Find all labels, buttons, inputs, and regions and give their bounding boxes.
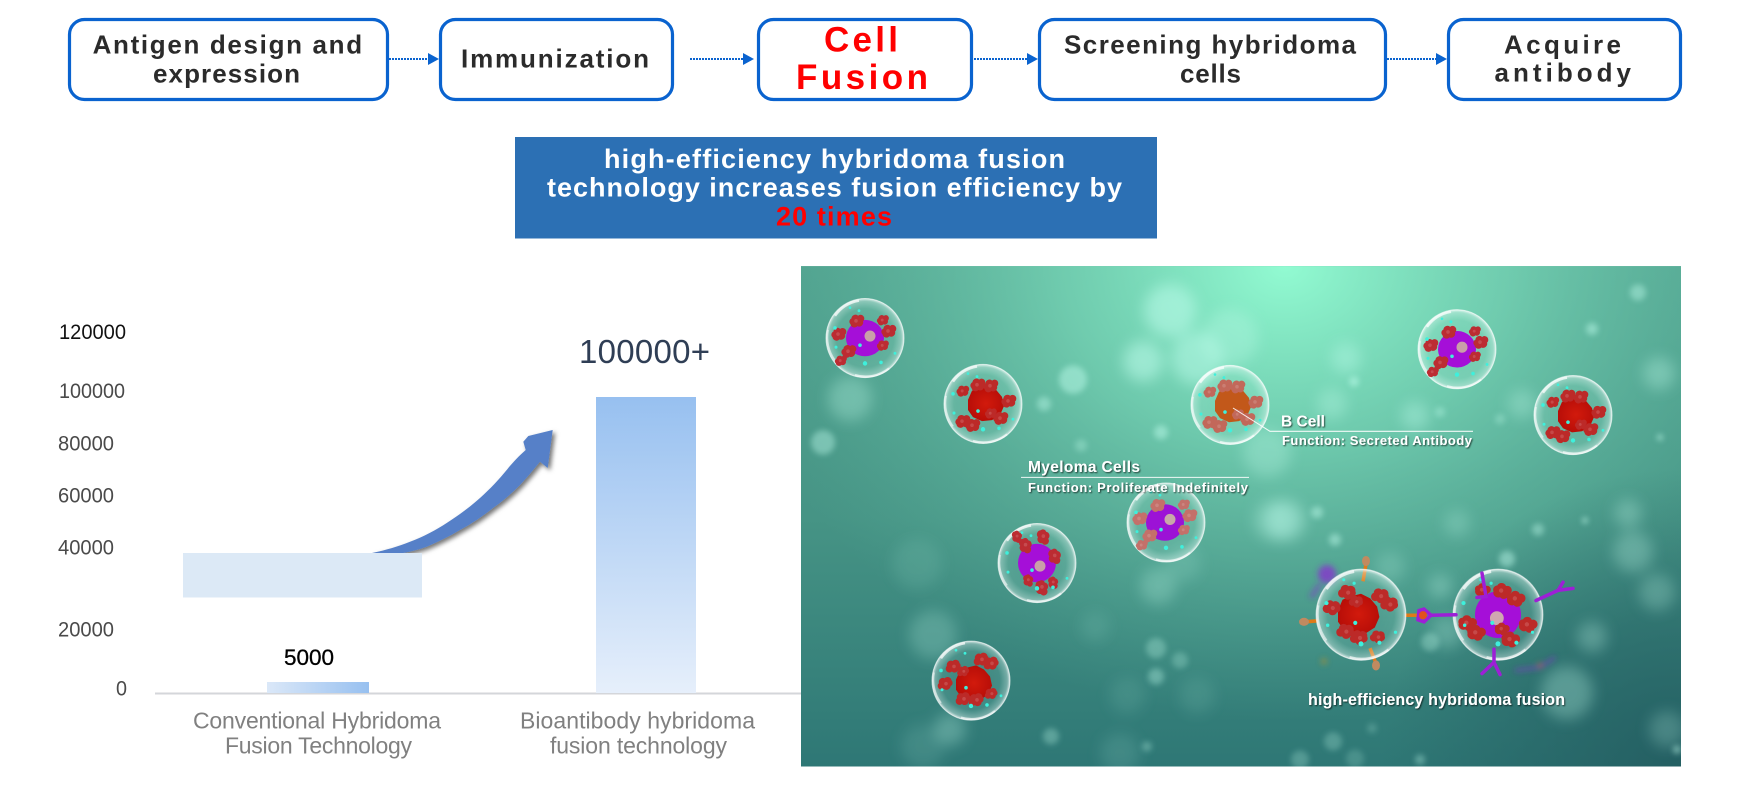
step: immunization — [440, 20, 672, 100]
step: screening hybridoma cells: Screening hybridoma — [1064, 30, 1357, 60]
growth arrow — [372, 430, 553, 553]
fusion pair — [1299, 556, 1573, 675]
step: cell fusion — [758, 20, 972, 100]
label: B cell: Function: Secreted Antibody — [1282, 433, 1473, 448]
banner: fusion efficiency headline: high-efficiency hybridoma fusion — [604, 144, 1065, 174]
cell: labelled B cell — [1191, 365, 1269, 444]
panel: cell fusion illustration — [801, 266, 1685, 774]
cell: B cell bottom left — [932, 641, 1010, 720]
y axis labels: 120000 — [59, 321, 126, 344]
category label: conventional: Conventional Hybridoma — [193, 708, 441, 734]
callout line: myeloma — [1021, 476, 1249, 478]
y axis labels: 20000 — [58, 618, 114, 642]
step: cell fusion: Fusion — [796, 58, 928, 97]
bar: conventional 5000 — [267, 682, 369, 693]
y axis labels: 0 — [116, 678, 127, 700]
label: myeloma cells: Function: Proliferate Indefinitely — [1028, 480, 1249, 495]
cell: labelled myeloma — [1127, 483, 1205, 562]
bar: bioantibody 100000+ — [596, 397, 696, 693]
pale rectangle over arrow base — [183, 553, 422, 598]
cell: myeloma top left — [826, 299, 904, 378]
banner: fusion efficiency headline — [515, 137, 1157, 238]
banner: fusion efficiency headline: 20 times — [776, 202, 892, 232]
category label: conventional: Fusion Technology — [225, 732, 412, 758]
value label 5000: 5000 — [284, 645, 334, 670]
orange antibodies — [1308, 566, 1417, 662]
y axis labels: 60000 — [58, 484, 114, 508]
arrow: step 2 to 3 — [690, 53, 754, 65]
step: acquire antibody: antibody — [1494, 58, 1632, 88]
purple antibodies and link — [1418, 573, 1573, 675]
arrow: step 1 to 2 — [389, 53, 439, 65]
step: antigen design and expression: Antigen design and — [93, 30, 362, 60]
category label: conventional — [193, 708, 441, 758]
step: antigen design and expression: expression — [153, 58, 300, 88]
label: high-efficiency hybridoma fusion: high-efficiency hybridoma fusion — [1308, 691, 1565, 709]
step: acquire antibody: Acquire — [1504, 30, 1621, 60]
step: acquire antibody — [1448, 20, 1680, 100]
category label: bioantibody — [520, 708, 755, 758]
axis baseline — [155, 692, 805, 694]
step: antigen design and expression — [70, 20, 388, 100]
label: B cell: B Cell — [1281, 414, 1325, 431]
category label: bioantibody: Bioantibody hybridoma — [520, 708, 755, 734]
y axis labels: 80000 — [58, 432, 114, 456]
banner: fusion efficiency headline: technology increases fusion efficiency by — [547, 172, 1122, 202]
category label: bioantibody: fusion technology — [550, 732, 728, 758]
cell: myeloma centre — [998, 524, 1076, 603]
label: B cell — [1281, 414, 1473, 448]
fused purple cell — [1453, 569, 1547, 663]
bar chart: fusion yield comparison — [58, 321, 805, 758]
process flow — [70, 20, 1680, 100]
step: screening hybridoma cells — [1040, 20, 1386, 100]
label: myeloma cells — [1028, 459, 1249, 495]
y axis labels: 40000 — [58, 536, 114, 560]
label: myeloma cells: Myeloma Cells — [1028, 459, 1140, 476]
arrow: step 4 to 5 — [1387, 53, 1447, 65]
callout line: B cell — [1233, 408, 1473, 431]
y axis labels: 100000 — [59, 380, 125, 403]
cell: B cell right — [1534, 376, 1612, 455]
faint antibodies — [1311, 565, 1555, 670]
step: screening hybridoma cells: cells — [1180, 58, 1241, 88]
step: immunization: Immunization — [461, 44, 649, 74]
cell: myeloma top right — [1418, 310, 1496, 389]
step: cell fusion: Cell — [824, 21, 898, 60]
arrow: step 3 to 4 — [974, 53, 1038, 65]
fused red cell — [1315, 569, 1406, 660]
value label 100000+: 100000+ — [579, 333, 710, 370]
cell: B cell left — [944, 364, 1022, 443]
y axis labels — [58, 321, 127, 700]
